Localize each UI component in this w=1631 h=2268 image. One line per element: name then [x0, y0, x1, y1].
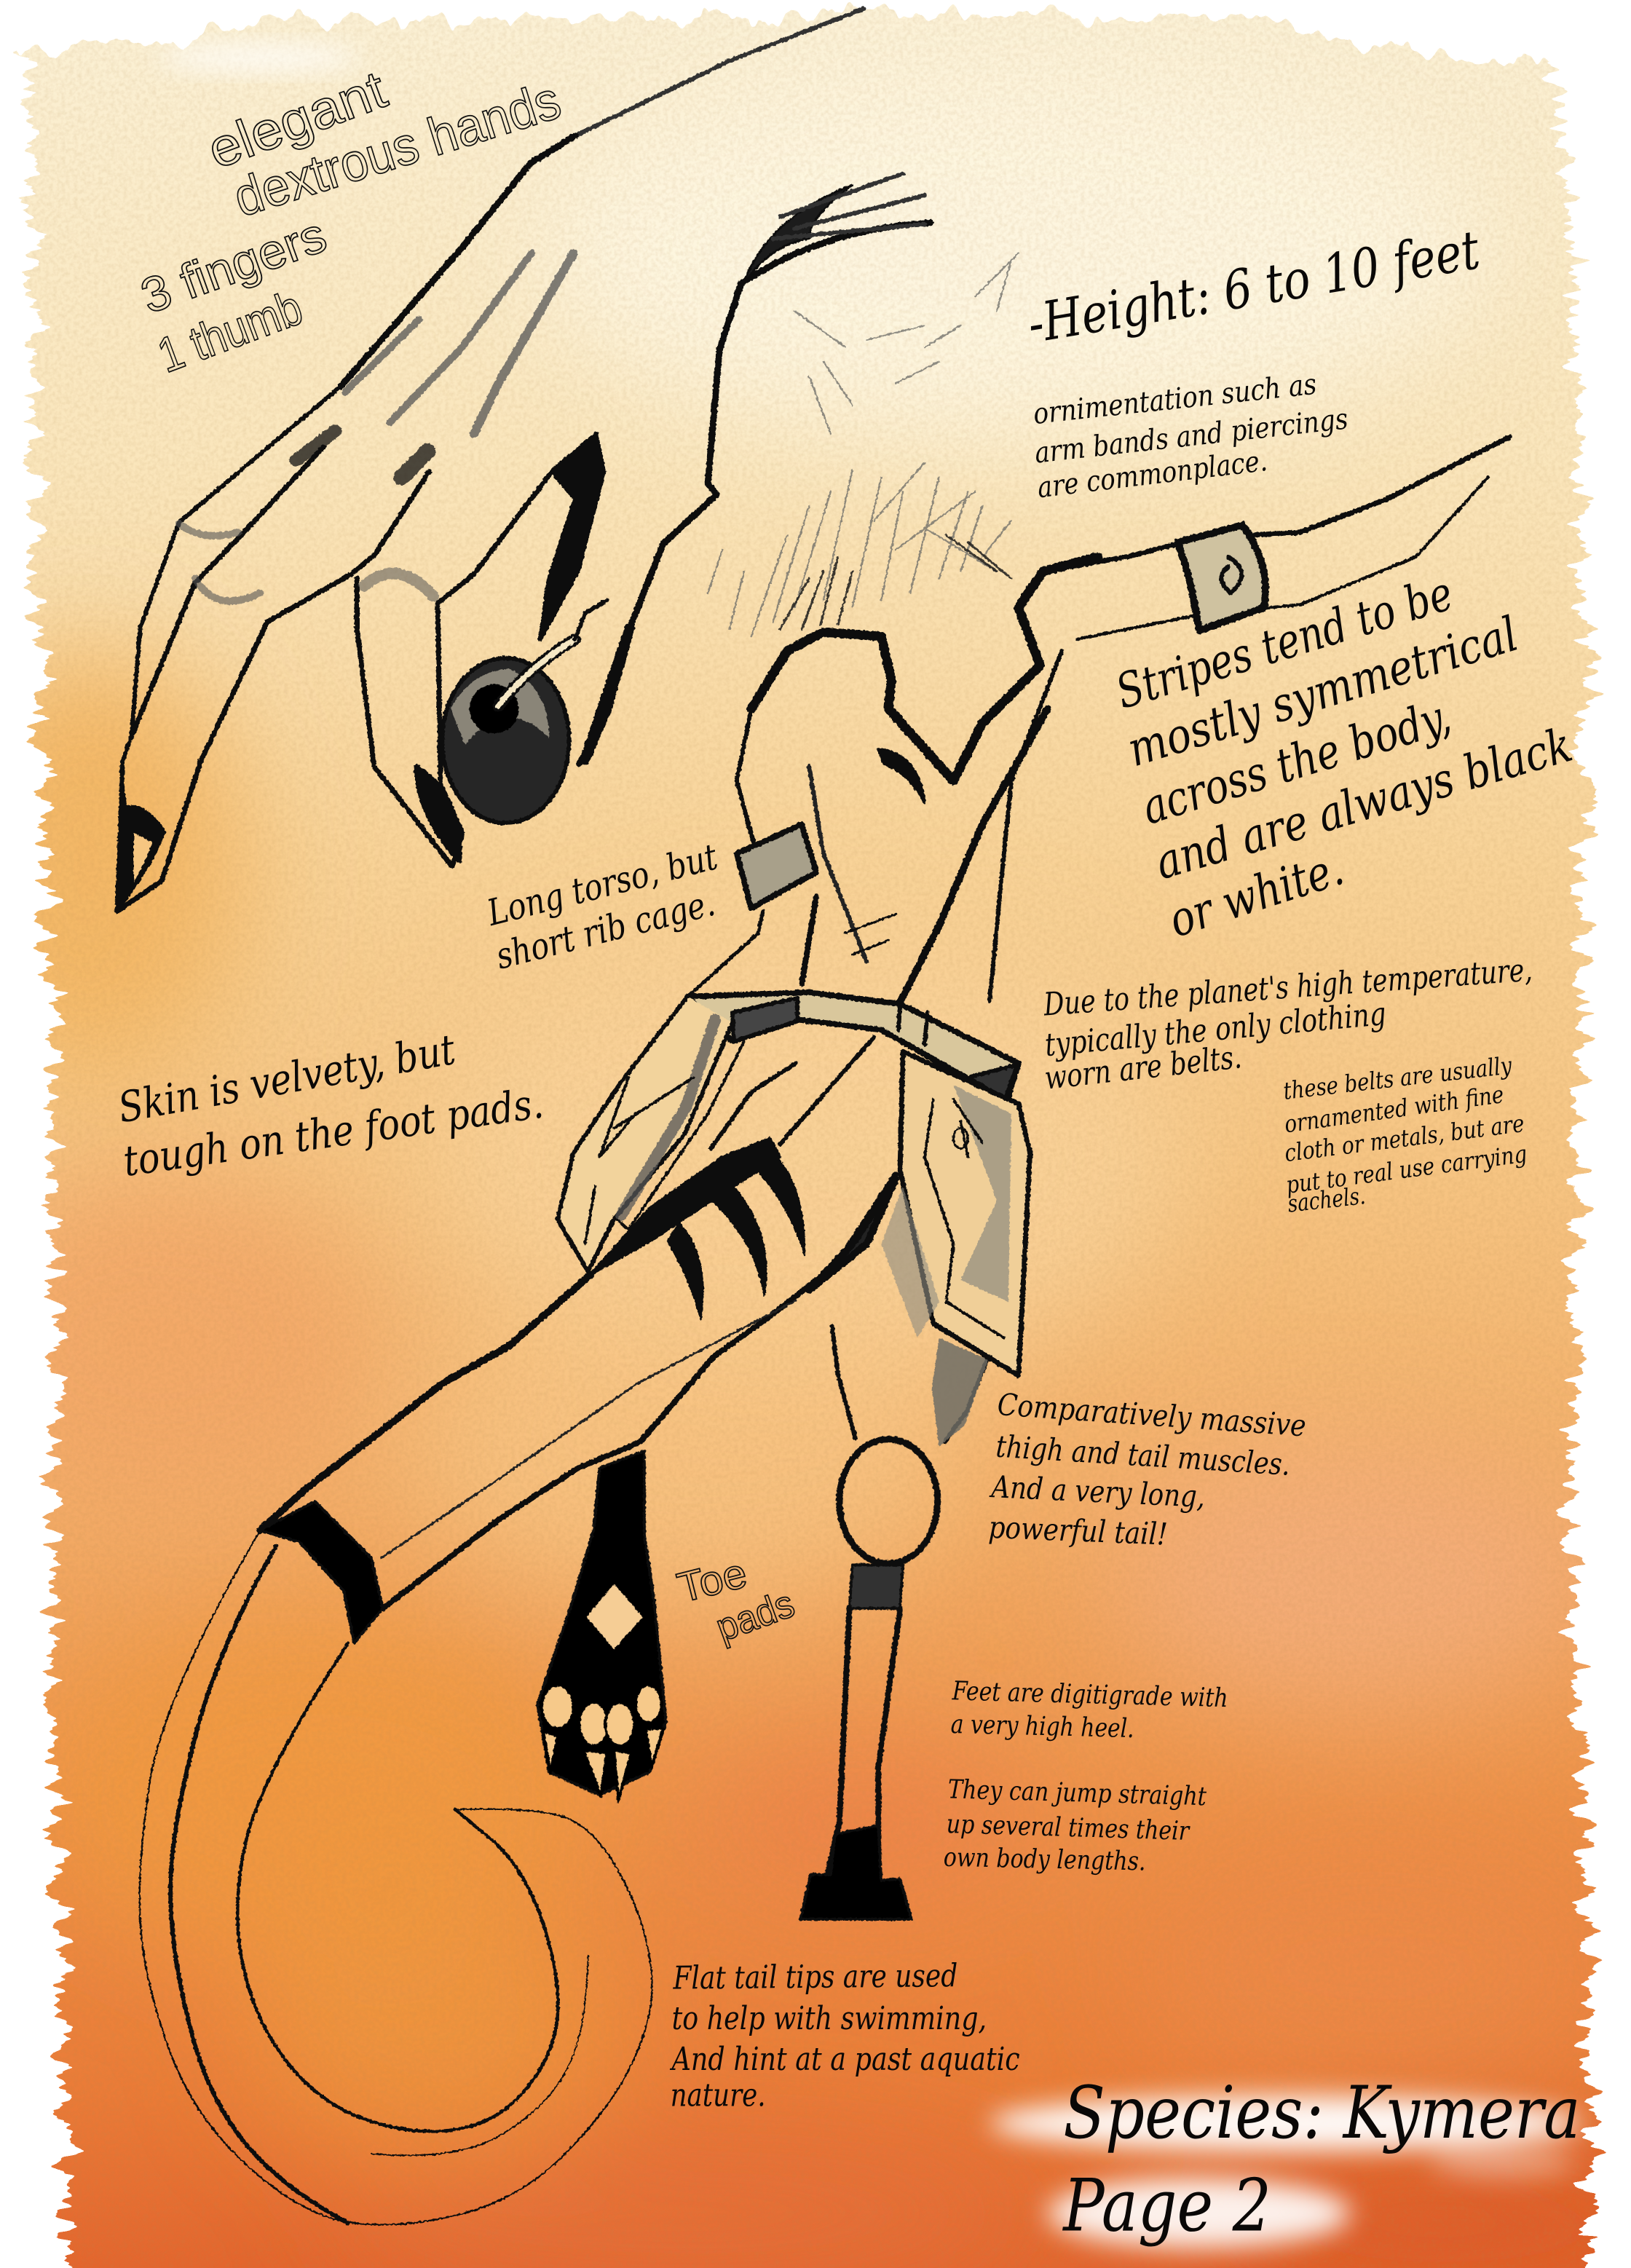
note: long torso: Long torso, but: [482, 835, 722, 934]
note: belts: sachels.: [1286, 1182, 1367, 1218]
note: stripes: [1110, 566, 1578, 949]
handwritten note: elegant dextrous hands: dextrous hands: [227, 70, 567, 228]
note: stripes: Stripes tend to be: [1110, 566, 1459, 720]
standing shin and hoof-like foot: [800, 1565, 912, 1919]
left sachel: [558, 997, 744, 1271]
note: long torso: [482, 835, 722, 978]
note: thigh and tail muscles: [988, 1386, 1307, 1552]
note: stripes: or white.: [1163, 840, 1350, 949]
palm contour with wrist tuft: [580, 173, 931, 764]
note: skin: Skin is velvety, but: [114, 1025, 459, 1132]
body drawing: torso, fur and arm: [558, 253, 1509, 1375]
note: flat tail tips: to help with swimming,: [672, 2000, 987, 2037]
orb held by the hand: [442, 600, 607, 823]
note: ornamentation: arm bands and piercings: [1033, 402, 1350, 470]
note: ornamentation: [1032, 368, 1350, 505]
handwritten note: elegant dextrous hands: elegant: [200, 60, 394, 180]
white brush highlights behind title: [990, 2096, 1582, 2248]
note: belts: put to real use carrying: [1284, 1140, 1528, 1199]
title: species and page: [1062, 2071, 1581, 2248]
hanging foot with toe pads: [537, 1451, 666, 1801]
handwritten note: toe pads: [673, 1550, 800, 1650]
note: clothing: worn are belts.: [1043, 1038, 1244, 1097]
second finger and nail: [357, 434, 596, 866]
note: flat tail tips: [669, 1957, 1020, 2114]
wrist and top of hand contour: [117, 9, 864, 912]
handwritten note: 3 fingers 1 thumb: [134, 208, 333, 384]
note: skin: tough on the foot pads.: [120, 1079, 546, 1186]
thumb web dark triangle: [540, 437, 604, 639]
legs and feet drawing: [537, 1186, 988, 1919]
height heading: -Height: 6 to 10 feet: [1024, 219, 1484, 356]
note: flat tail tips: Flat tail tips are used: [672, 1957, 958, 1997]
hand drawing with cherry-like orb and piercing: [117, 9, 931, 912]
torso contours: [687, 651, 1062, 1005]
handwritten note: 3 fingers 1 thumb: 1 thumb: [151, 280, 309, 384]
note: flat tail tips: nature.: [671, 2077, 766, 2114]
handwritten note: 3 fingers 1 thumb: 3 fingers: [134, 208, 333, 324]
first finger and nail: [117, 447, 429, 912]
tail drawing: [140, 1174, 896, 2225]
note: thigh and tail muscles: Comparatively massive: [996, 1386, 1307, 1444]
note: flat tail tips: And hint at a past aquatic: [669, 2041, 1020, 2078]
note: digitigrade feet: up several times their: [946, 1809, 1190, 1846]
note: stripes: across the body,: [1136, 689, 1457, 836]
note: belts: cloth or metals, but are: [1283, 1110, 1526, 1167]
note: digitigrade feet: [943, 1676, 1228, 1877]
note: belts: [1282, 1051, 1528, 1218]
raised arm with band: [1043, 437, 1509, 639]
chest fur hatching: [708, 253, 1019, 636]
knee: [840, 1439, 938, 1564]
note: stripes: mostly symmetrical: [1121, 606, 1524, 778]
knuckle shading: [296, 253, 574, 478]
note: thigh and tail muscles: thigh and tail muscles.: [995, 1429, 1291, 1482]
tail upper contours: [260, 1174, 896, 1608]
note: thigh and tail muscles: And a very long,: [988, 1469, 1206, 1514]
belt: [687, 992, 1019, 1101]
flat curled tail tip: [140, 1530, 652, 2225]
handwritten note: toe pads: Toe: [673, 1550, 751, 1612]
handwritten note: toe pads: pads: [711, 1581, 800, 1650]
note: belts: these belts are usually: [1282, 1051, 1514, 1105]
note: ornamentation: are commonplace.: [1035, 444, 1269, 505]
right sachel with gray shading: [900, 1051, 1030, 1375]
standing thigh: [832, 1186, 988, 1447]
note: ornamentation: ornimentation such as: [1032, 368, 1318, 431]
note: long torso: short rib cage.: [491, 882, 719, 978]
note: belts: ornamented with fine: [1283, 1080, 1506, 1138]
shoulder and chest stripes: [751, 557, 1098, 781]
black tail band: [260, 1501, 383, 1643]
note: digitigrade feet: own body lengths.: [943, 1843, 1146, 1877]
note: digitigrade feet: Feet are digitigrade with: [951, 1676, 1228, 1713]
note: clothing: typically the only clothing: [1043, 995, 1388, 1064]
gripping hand and claws: [591, 1037, 874, 1319]
note: clothing: [1042, 952, 1533, 1097]
title: species and page: Page 2: [1062, 2164, 1271, 2248]
note: skin: [114, 1025, 546, 1186]
note: digitigrade feet: a very high heel.: [950, 1710, 1134, 1744]
note: thigh and tail muscles: powerful tail!: [988, 1509, 1168, 1552]
note: digitigrade feet: They can jump straight: [947, 1774, 1207, 1811]
